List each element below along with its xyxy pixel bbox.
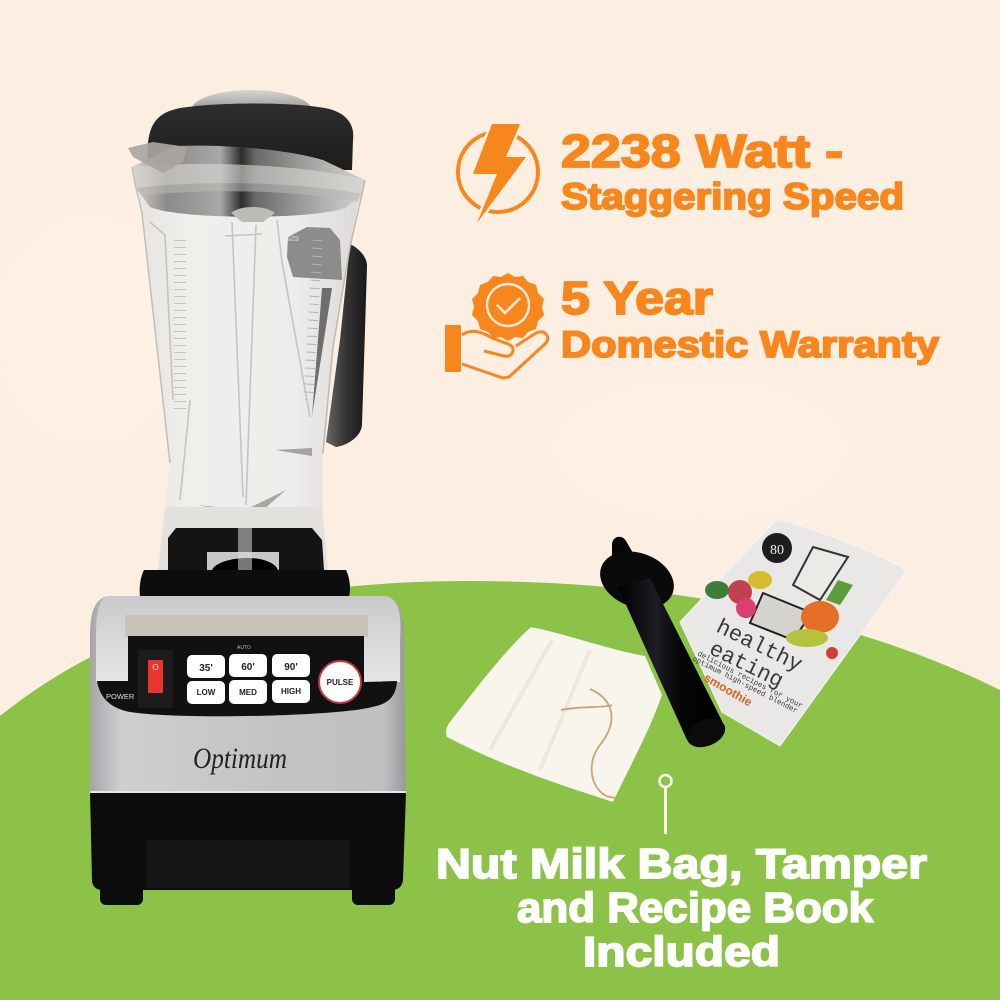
drawstring: [561, 689, 615, 798]
jar lid: [148, 90, 353, 170]
brand script: Optimum: [193, 742, 287, 775]
heading: wattage: Staggering Speed: [561, 176, 904, 217]
recipe book: [680, 519, 907, 746]
speed buttons: 35': [199, 663, 213, 674]
book fruits: [705, 571, 853, 659]
speed buttons: MED: [239, 688, 257, 697]
heading: warranty: 5 Year: [561, 272, 713, 324]
black base: [90, 791, 406, 905]
book logo: smoothie: [702, 670, 755, 709]
speed buttons: [187, 654, 310, 704]
icon: warranty badge in hand: [445, 273, 548, 378]
jar body: 825: [287, 234, 299, 241]
book title: [691, 615, 806, 716]
book blender art: 80: [770, 543, 784, 558]
speed buttons: 60': [241, 662, 255, 673]
accessories caption: Nut Milk Bag, Tamper: [436, 840, 927, 887]
book title: eating: [705, 637, 787, 694]
icon: lightning bolt: [458, 124, 538, 223]
silver housing: [90, 596, 406, 792]
book blender art: [750, 533, 848, 640]
control panel: [97, 636, 397, 716]
nut milk bag: [446, 627, 662, 802]
graduation ticks: [174, 240, 186, 413]
heading: wattage: [561, 125, 904, 217]
accessories caption: and Recipe Book: [517, 884, 874, 931]
book title: healthy: [712, 615, 806, 678]
accessories caption: Included: [583, 928, 780, 975]
heading: warranty: [561, 272, 939, 365]
inner shade: [312, 288, 332, 416]
book title: optimum high-speed blender: [691, 656, 799, 716]
tamper: [592, 537, 729, 753]
blender product: [90, 90, 406, 905]
measure window: [287, 227, 342, 280]
speed buttons: 90': [284, 662, 298, 673]
heading: warranty: Domestic Warranty: [561, 324, 939, 365]
speed buttons: LOW: [197, 688, 216, 697]
book title: delicious recipes for your: [696, 651, 804, 711]
callout pin: [660, 775, 672, 834]
power switch: [138, 650, 173, 708]
centre rib: [231, 207, 275, 222]
control panel: POWER: [106, 692, 135, 701]
control panel: AUTO: [237, 645, 251, 651]
heading: wattage: 2238 Watt -: [561, 125, 843, 177]
accessories caption: [436, 840, 927, 975]
jar collar: [158, 507, 328, 570]
jar body: [128, 142, 365, 516]
green hump: [0, 581, 1000, 1000]
pulse button: PULSE: [327, 678, 354, 687]
base plate: [140, 570, 350, 597]
jar handle: [326, 244, 367, 447]
pour spout: [128, 142, 187, 173]
speed buttons: HIGH: [281, 687, 301, 696]
pulse button: [319, 661, 361, 703]
